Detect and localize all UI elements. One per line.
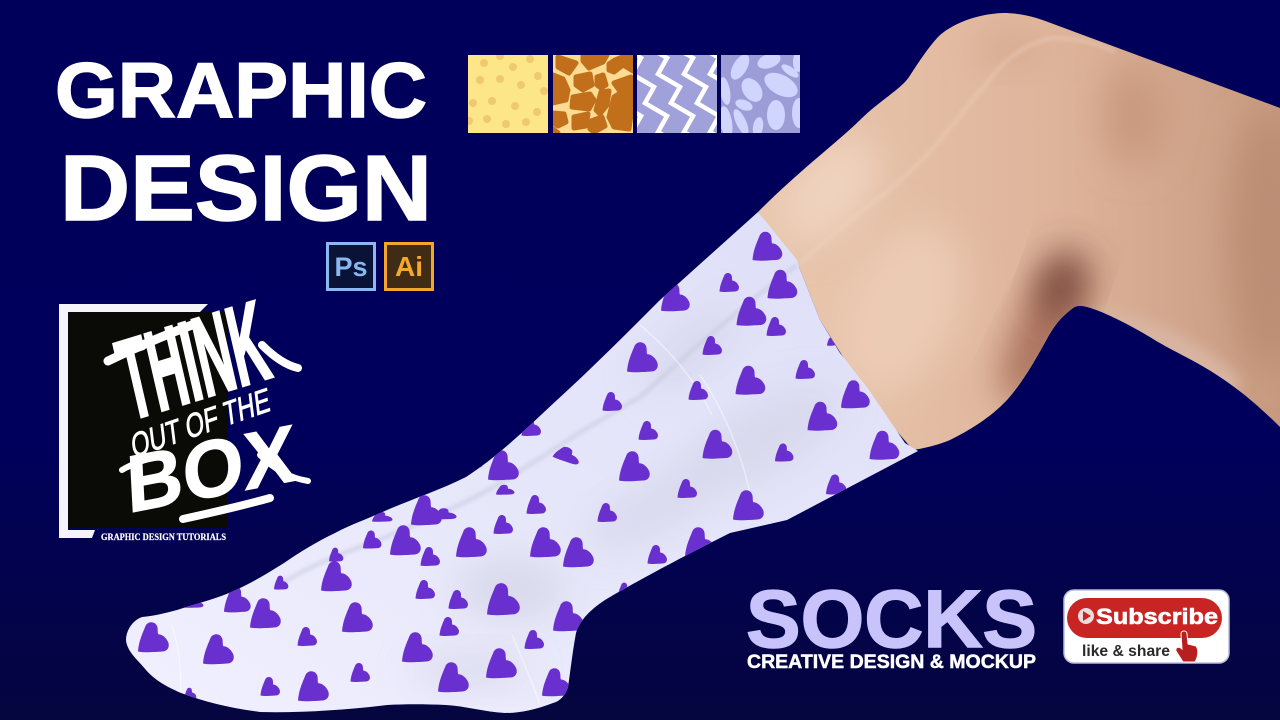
swatch: feathers xyxy=(721,55,800,133)
logo frame xyxy=(59,304,208,538)
leg separation xyxy=(919,36,1114,163)
subscribe button xyxy=(1064,590,1229,663)
title: Graphic Design xyxy=(55,46,432,240)
logo brush strokes xyxy=(108,325,308,519)
icon: Photoshop: Ps xyxy=(334,252,368,282)
logo lettering: BOX xyxy=(124,408,298,531)
title: Graphic Design: DESIGN xyxy=(60,136,432,240)
icon: hand cursor xyxy=(1176,631,1198,662)
icon: Illustrator: Ai xyxy=(395,251,423,282)
logo caption: GRAPHIC DESIGN TUTORIALS xyxy=(101,533,226,543)
logo: think out of the box xyxy=(59,277,308,543)
title: Graphic Design: GRAPHIC xyxy=(55,46,427,134)
sock crease xyxy=(276,265,797,587)
sock shading xyxy=(410,295,855,688)
play icon xyxy=(1078,608,1094,624)
pattern swatches xyxy=(468,55,800,133)
socks xyxy=(126,212,918,713)
logo lettering: THINK xyxy=(107,277,279,443)
subscribe text: Subscribe xyxy=(1096,604,1218,629)
logo lettering: OUT OF THE xyxy=(129,381,272,466)
app icons xyxy=(328,244,432,290)
sock seams xyxy=(512,324,750,705)
swatch: chevron xyxy=(637,55,717,133)
socks heading: SOCKS xyxy=(746,574,1037,665)
legs xyxy=(758,13,1280,450)
socks subtitle: CREATIVE DESIGN & MOCKUP xyxy=(747,652,1036,673)
logo lettering xyxy=(107,277,298,531)
logo black box xyxy=(68,312,227,528)
red pill xyxy=(1067,598,1222,638)
like and share text: like & share xyxy=(1082,643,1170,660)
hearts xyxy=(138,232,899,701)
swatch: giraffe xyxy=(553,55,633,133)
swatch: yellow dots xyxy=(465,52,548,133)
